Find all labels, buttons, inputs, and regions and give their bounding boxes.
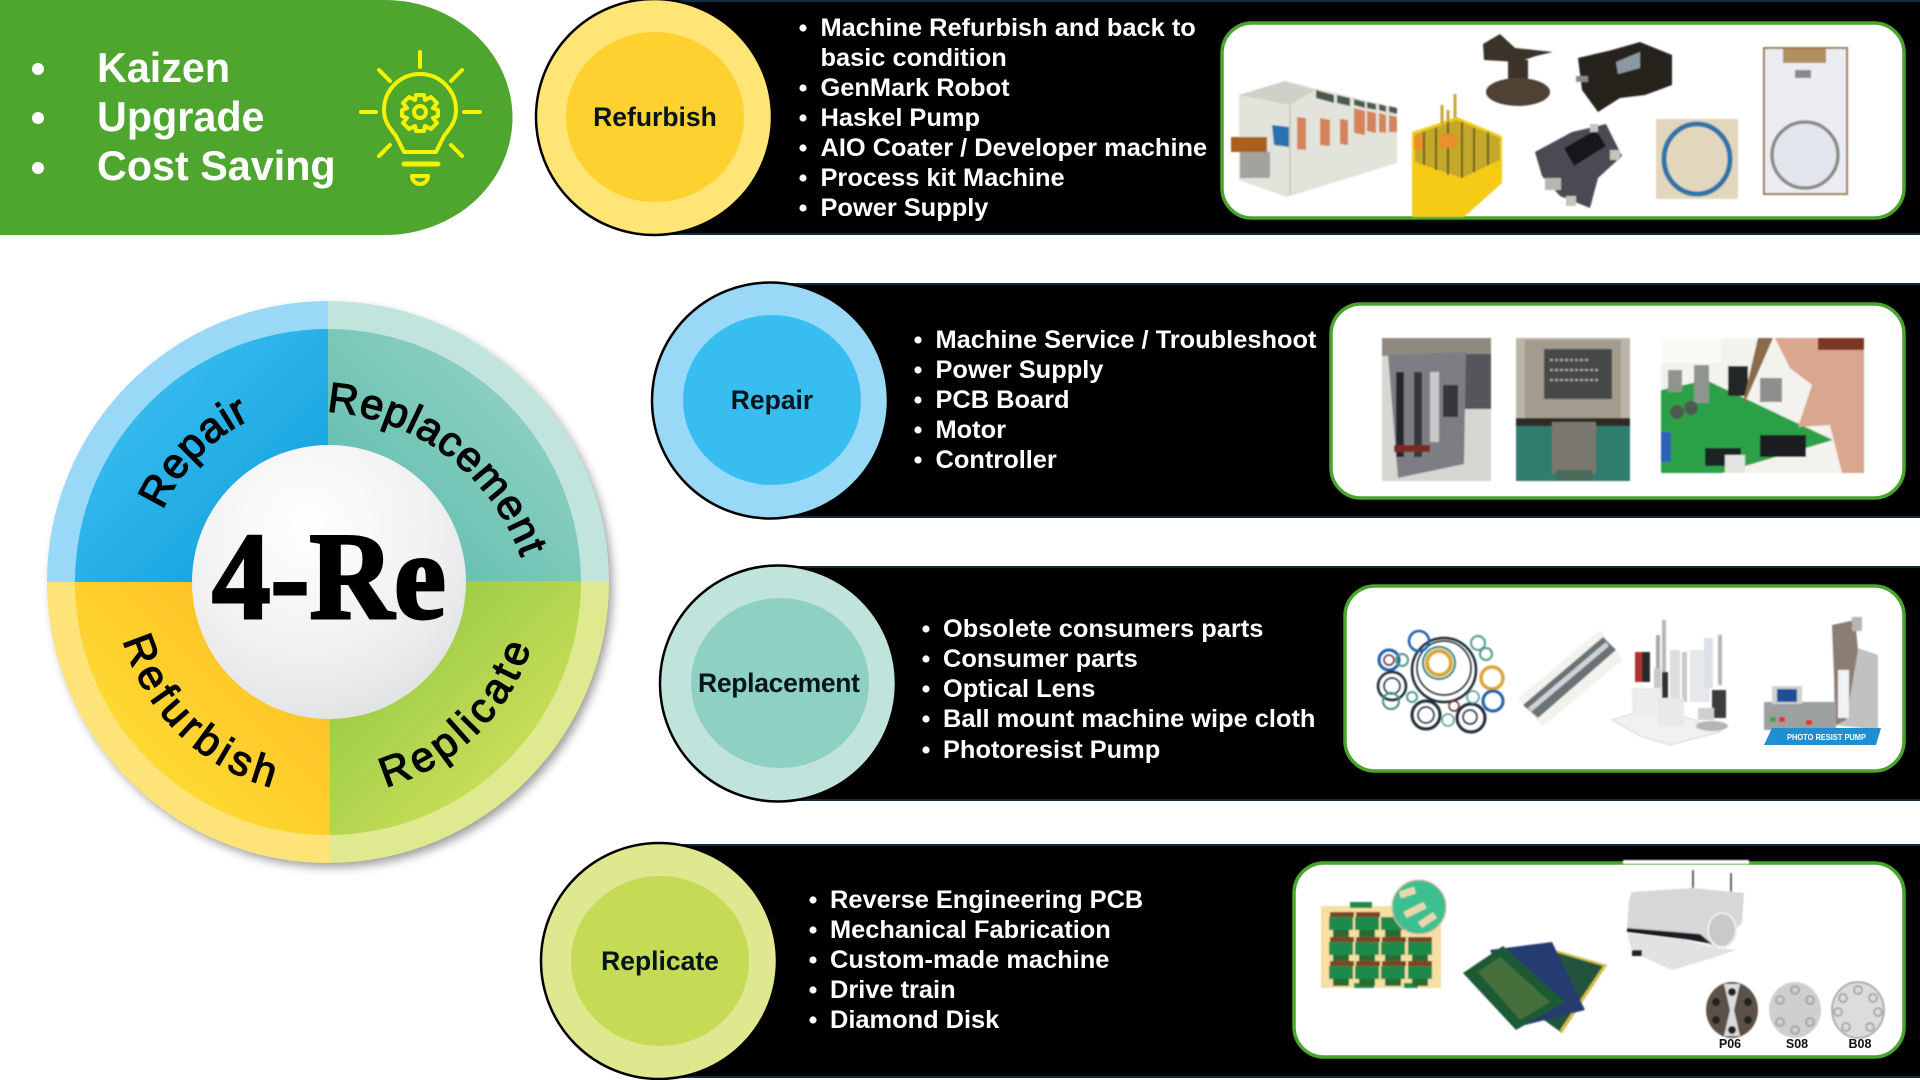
segment: Refurbish <box>47 582 330 863</box>
list: Replicate: Diamond Disk <box>830 1006 1000 1034</box>
list: Repair: Machine Service / Troubleshoot <box>936 326 1317 354</box>
image panel: Repair photos <box>1331 304 1904 498</box>
panel: Repair row <box>652 282 1920 518</box>
list: Repair: Power Supply <box>936 356 1103 384</box>
photo: o-rings <box>1378 631 1503 732</box>
list: Replicate: Mechanical Fabrication <box>830 916 1111 944</box>
circle: Replacement <box>660 566 896 802</box>
photo: optical lens tube <box>1518 630 1623 727</box>
list: Refurbish: Process kit Machine <box>820 164 1065 192</box>
list: Refurbish: GenMark Robot <box>820 74 1010 102</box>
list: Replacement: Obsolete consumers parts <box>943 615 1263 643</box>
photo: motor <box>1576 42 1672 112</box>
disk labels <box>1719 1037 1872 1051</box>
image panel: Replacement photos <box>1345 586 1904 771</box>
segment: Replicate: Replicate <box>378 643 530 788</box>
photo: soldering PCB <box>1661 338 1864 473</box>
center hub <box>192 445 466 719</box>
circle: Refurbish: Refurbish <box>593 102 717 132</box>
list: Refurbish: AIO Coater / Developer machine <box>820 134 1207 162</box>
circle: Repair: Repair <box>731 385 813 415</box>
circle: Repair <box>652 282 888 518</box>
banner list <box>32 45 336 189</box>
segment: Repair: Repair <box>138 399 245 508</box>
list: Replicate: Drive train <box>830 976 956 1004</box>
list: Replicate: Reverse Engineering PCB <box>830 886 1143 914</box>
photo: filters <box>1612 620 1728 745</box>
photo: diamond disks <box>1706 982 1884 1038</box>
photo: yellow machine <box>1412 94 1502 217</box>
photo: display board <box>1516 338 1630 481</box>
panel: Replicate row <box>541 843 1920 1079</box>
image panel: Replicate photos <box>1294 860 1904 1057</box>
disk labels: B08 <box>1849 1037 1872 1051</box>
list: Repair <box>914 326 1317 474</box>
segment: Replacement <box>328 301 609 581</box>
segment: Replicate <box>330 581 609 863</box>
segment: Refurbish: Refurbish <box>122 632 275 788</box>
disk labels: P06 <box>1719 1037 1741 1051</box>
circle: Replacement: Replacement <box>698 668 860 698</box>
photo: blue ring <box>1656 119 1738 199</box>
list: Replacement: Consumer parts <box>943 645 1138 673</box>
segment: Repair <box>47 301 328 582</box>
photo: process machine <box>1231 81 1397 197</box>
title: 4-Re: 4-Re <box>212 508 446 645</box>
list: Replacement: Photoresist Pump <box>943 736 1160 764</box>
photo: GenMark robot arm <box>1483 34 1553 106</box>
photo: control rack <box>1382 338 1491 481</box>
circle: Replicate: Replicate <box>601 946 719 976</box>
photo: photoresist pump <box>1764 617 1878 730</box>
list: Refurbish: Haskel Pump <box>820 104 980 132</box>
list: Refurbish: Machine Refurbish and back to <box>820 14 1196 42</box>
list: Replicate <box>809 886 1143 1034</box>
circle: Refurbish <box>536 0 772 235</box>
list: Replicate: Custom-made machine <box>830 946 1109 974</box>
segment: Replacement: Replacement <box>329 382 546 558</box>
banner list: Cost Saving <box>97 143 336 189</box>
list: Repair: Controller <box>936 446 1057 474</box>
photo: Haskel pump <box>1535 124 1622 208</box>
photo: stacked PCBs <box>1463 942 1607 1033</box>
photo: mobile robot <box>1623 860 1749 970</box>
photo: wafer plate <box>1763 47 1848 195</box>
banner list: Kaizen <box>97 45 230 91</box>
chart: 4-Re wheel <box>46 300 618 874</box>
list: Refurbish: basic condition <box>820 44 1007 72</box>
list: Repair: PCB Board <box>936 386 1070 414</box>
list: Refurbish: Power Supply <box>820 194 988 222</box>
icon: light bulb with gear <box>361 52 480 184</box>
panel: Replacement row <box>660 566 1920 802</box>
image panel: Refurbish equipment <box>1222 23 1904 218</box>
wheel shadow <box>52 307 612 867</box>
panel: Refurbish row <box>536 0 1920 235</box>
photo label: PHOTO RESIST PUMP: PHOTO RESIST PUMP <box>1787 732 1866 742</box>
list: Replacement <box>922 615 1315 764</box>
list: Replacement: Optical Lens <box>943 675 1095 703</box>
banner list: Upgrade <box>97 94 265 140</box>
photo: PCB panel <box>1321 880 1446 988</box>
list: Refurbish <box>799 14 1207 222</box>
circle: Replicate <box>541 843 777 1079</box>
list: Repair: Motor <box>936 416 1006 444</box>
photo label: PHOTO RESIST PUMP <box>1764 728 1881 745</box>
list: Replacement: Ball mount machine wipe cloth <box>943 705 1315 733</box>
disk labels: S08 <box>1786 1037 1808 1051</box>
panel: kaizen banner <box>0 0 512 235</box>
